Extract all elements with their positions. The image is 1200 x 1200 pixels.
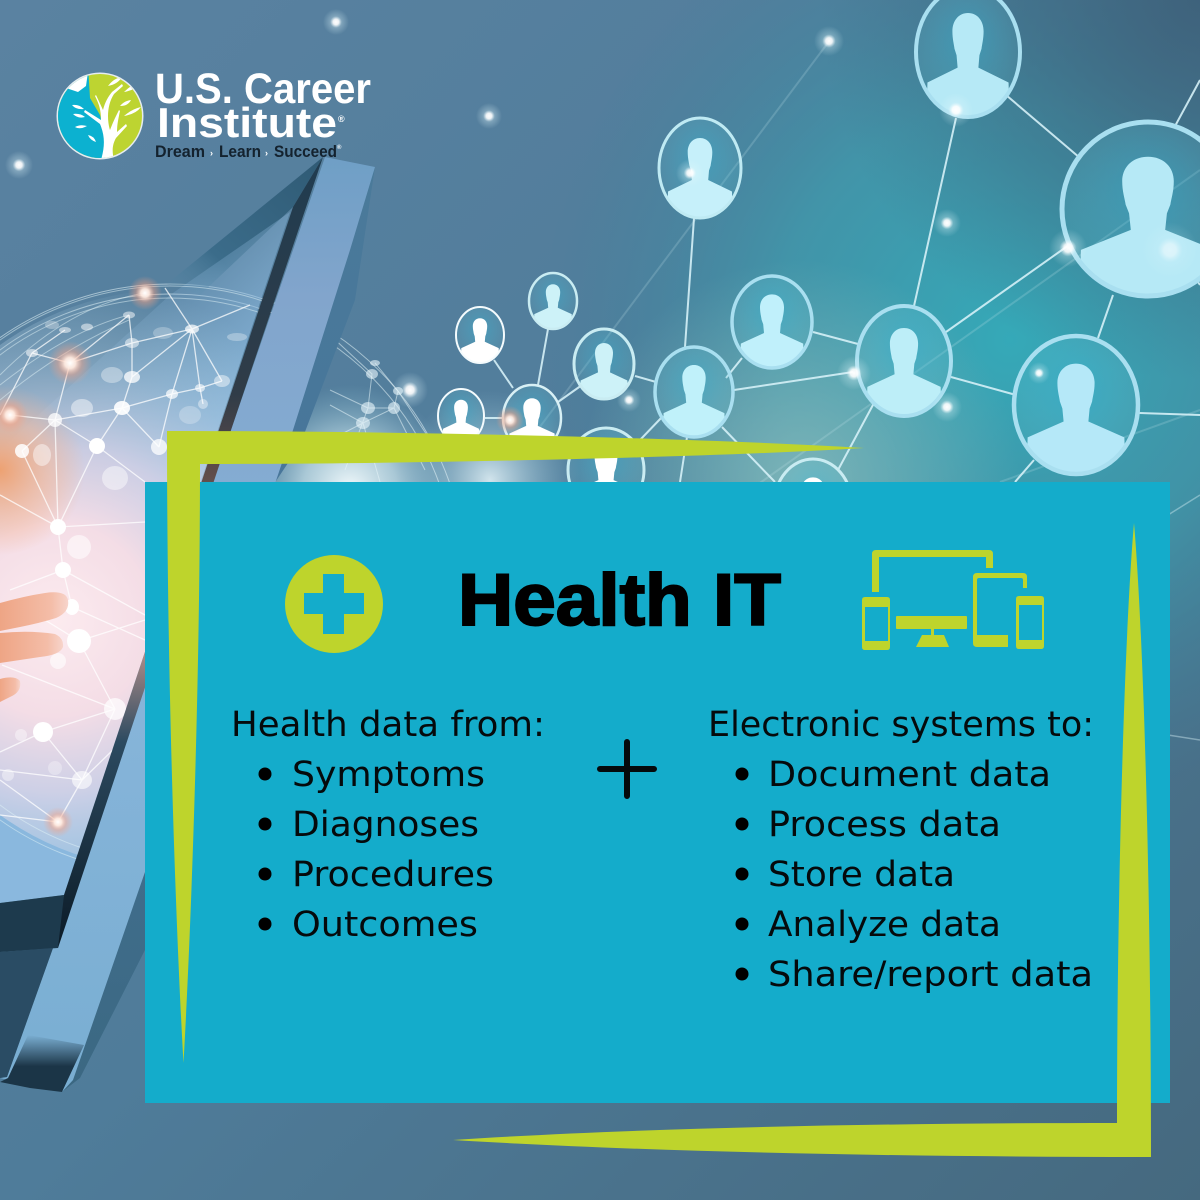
monitor screen xyxy=(0,212,290,903)
text block: health data list: Procedures xyxy=(292,855,494,895)
network of people icons xyxy=(5,0,1200,740)
green frame: bottom right corner xyxy=(453,523,1151,1157)
monitor xyxy=(0,157,375,1092)
faint line right of panel xyxy=(1168,495,1200,740)
network connection lines xyxy=(485,80,1200,482)
icon: medical cross xyxy=(285,555,383,653)
text block: electronic systems list: Store data xyxy=(768,855,955,895)
globe on screen with hand xyxy=(0,277,262,859)
light flares xyxy=(5,9,1198,434)
text block: health data list: Diagnoses xyxy=(292,805,479,845)
icon: plus sign xyxy=(600,742,654,796)
glowing globe xyxy=(0,300,243,855)
monitor lower body xyxy=(0,948,53,1078)
text block: electronic systems list: Electronic systems to: xyxy=(708,705,1094,745)
teal content panel xyxy=(145,482,1170,1103)
text block: health data list: Health data from: xyxy=(231,705,545,745)
logo: › xyxy=(265,148,268,158)
green frame: top left corner xyxy=(167,431,864,1063)
monitor top wedge xyxy=(167,157,323,295)
logo: Learn xyxy=(219,142,261,161)
text block: electronic systems list: Share/report data xyxy=(768,955,1093,995)
logo: Succeed xyxy=(274,142,337,161)
monitor back shadow xyxy=(62,167,375,1092)
text block: electronic systems list: Process data xyxy=(768,805,1001,845)
text block: electronic systems list: Document data xyxy=(768,755,1051,795)
monitor bezel strip xyxy=(52,157,323,948)
icon: connected devices xyxy=(862,550,1044,650)
text block: health data list: Symptoms xyxy=(292,755,485,795)
text block: health data list: Outcomes xyxy=(292,905,478,945)
monitor foot shadow xyxy=(0,1035,84,1092)
logo: Institute xyxy=(157,99,337,146)
globe network lines xyxy=(0,288,250,822)
globe wire arcs xyxy=(0,286,262,859)
hot flares on globe xyxy=(129,277,161,309)
logo emblem: tree xyxy=(56,72,144,160)
logo wordmark: U.S. Career xyxy=(155,65,371,113)
text block: electronic systems list: Analyze data xyxy=(768,905,1001,945)
logo: › xyxy=(210,148,213,158)
monitor lower bezel xyxy=(0,895,64,952)
globe nodes xyxy=(2,312,247,789)
logo: ® xyxy=(338,114,345,124)
person icons xyxy=(438,0,1200,551)
logo: ® xyxy=(337,144,342,151)
logo xyxy=(56,72,370,160)
title: Health IT xyxy=(458,560,781,641)
hand fingers xyxy=(0,592,68,702)
text block: electronic systems list xyxy=(708,705,1094,995)
globe behind monitor, right part xyxy=(0,284,466,876)
text block: health data list xyxy=(231,705,545,945)
monitor side face xyxy=(0,157,375,1092)
logo tagline: Dream xyxy=(155,142,205,161)
